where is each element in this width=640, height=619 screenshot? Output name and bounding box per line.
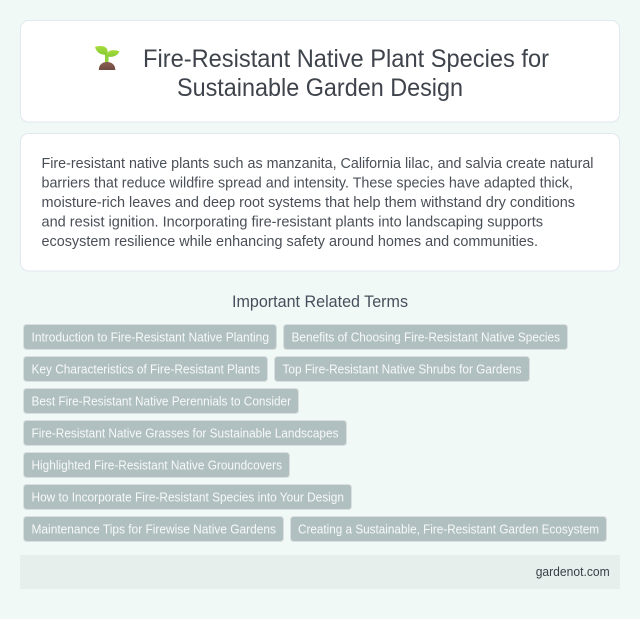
title xyxy=(143,45,549,102)
description text: ecosystem resilience while enhancing safety around homes and communities. xyxy=(42,233,538,250)
tag: top shrubs xyxy=(274,356,530,382)
tag: groundcovers xyxy=(24,452,290,478)
description text: Fire-resistant native plants such as manzanita, California lilac, and salvia create natural xyxy=(42,155,594,172)
icon: seedling xyxy=(95,46,120,70)
heading: important related terms: Important Related Terms xyxy=(232,293,408,311)
panel: description card xyxy=(20,134,620,271)
tag: native grasses: Fire-Resistant Native Grasses for Sustainable Landscapes xyxy=(32,426,339,440)
tag: maintenance tips: Maintenance Tips for Firewise Native Gardens xyxy=(32,522,276,536)
description text: barriers that reduce wildfire spread and intensity. These species have adapted thick, xyxy=(42,174,573,192)
title: Sustainable Garden Design xyxy=(177,74,463,102)
panel: title card xyxy=(20,20,620,122)
title: Fire-Resistant Native Plant Species for xyxy=(143,45,549,73)
tag: how to incorporate xyxy=(24,484,352,510)
tag: best perennials: Best Fire-Resistant Native Perennials to Consider xyxy=(32,394,292,408)
tag: key characteristics xyxy=(24,356,268,382)
tag: benefits xyxy=(284,324,568,350)
tag: how to incorporate: How to Incorporate Fire-Resistant Species into Your Design xyxy=(32,490,344,504)
tag: groundcovers: Highlighted Fire-Resistant Native Groundcovers xyxy=(32,458,282,472)
tags group xyxy=(24,324,606,542)
tag: introduction xyxy=(24,324,276,350)
footer bar xyxy=(20,555,620,589)
description text: moisture-rich leaves and deep root systems that help them withstand dry conditions xyxy=(42,194,575,211)
tag: benefits: Benefits of Choosing Fire-Resistant Native Species xyxy=(292,330,560,344)
description text: and resist ignition. Incorporating fire-resistant plants into landscaping supports xyxy=(42,214,543,230)
tag: sustainable ecosystem xyxy=(290,516,606,542)
tag: best perennials xyxy=(24,388,298,414)
tag: introduction: Introduction to Fire-Resistant Native Planting xyxy=(32,330,269,344)
tag: top shrubs: Top Fire-Resistant Native Shrubs for Gardens xyxy=(282,362,522,376)
tag: sustainable ecosystem: Creating a Sustainable, Fire-Resistant Garden Ecosystem xyxy=(298,522,599,536)
tag: key characteristics: Key Characteristics of Fire-Resistant Plants xyxy=(32,362,260,376)
tag: native grasses xyxy=(24,420,346,446)
tag: maintenance tips xyxy=(24,516,284,542)
description text xyxy=(42,155,594,250)
footer source text: gardenot.com xyxy=(536,564,610,579)
